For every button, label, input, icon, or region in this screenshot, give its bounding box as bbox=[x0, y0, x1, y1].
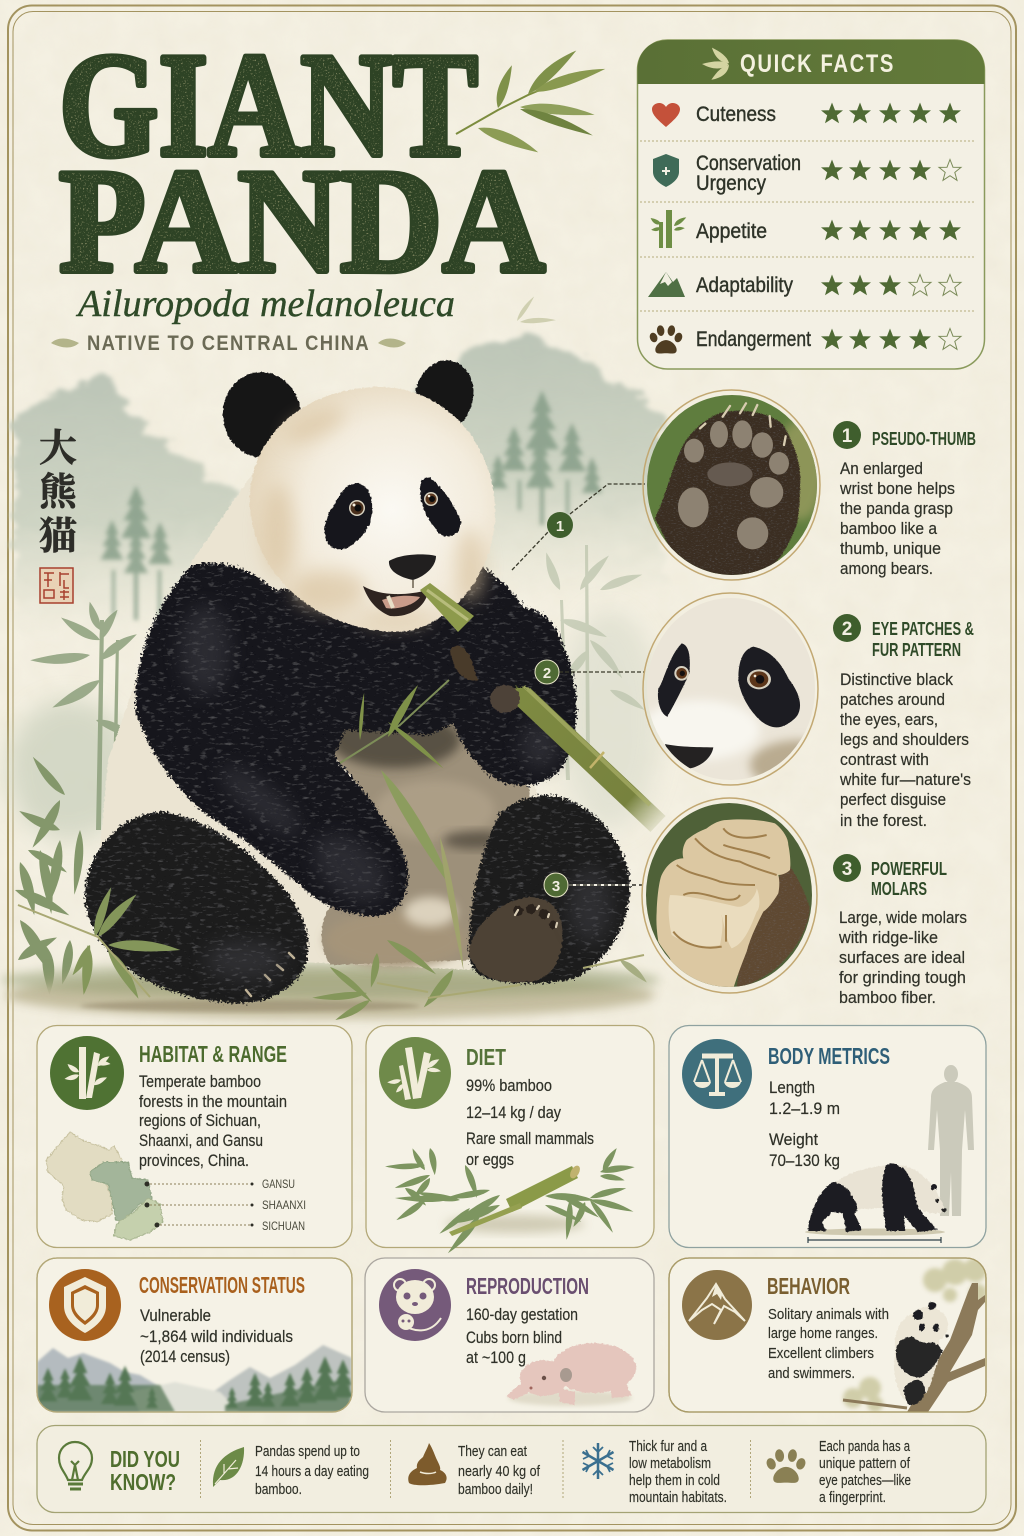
human silhouette bbox=[928, 1065, 974, 1216]
callout 2 text: eye patches: perfect disguise bbox=[840, 790, 946, 809]
bamboo stems on ground bbox=[18, 905, 644, 998]
title bbox=[59, 23, 545, 304]
callout 1 text: pseudo-thumb: among bears. bbox=[840, 559, 933, 578]
inset: paw bbox=[640, 388, 825, 583]
did you know heading: DID YOU bbox=[110, 1446, 180, 1472]
callout 2 text: eye patches: white fur—nature's bbox=[839, 770, 971, 789]
icon: mountain bbox=[682, 1270, 752, 1340]
fact: daily bamboo: bamboo daily! bbox=[458, 1481, 533, 1498]
callout 3 text: molars: bamboo fiber. bbox=[839, 988, 936, 1007]
habitat text: Shaanxi, and Gansu bbox=[139, 1131, 263, 1150]
giant panda illustration bbox=[18, 354, 658, 1024]
did you know heading: KNOW? bbox=[110, 1469, 176, 1495]
left hind leg bbox=[85, 812, 308, 1003]
scientific name: Ailuropoda melanoleuca bbox=[75, 283, 455, 325]
callout 2 text: eye patches: FUR PATTERN bbox=[872, 640, 961, 660]
callout 2 leader bbox=[559, 671, 645, 673]
icon: scales bbox=[682, 1039, 752, 1109]
fact: daily bamboo: nearly 40 kg of bbox=[458, 1463, 541, 1480]
right hind leg bbox=[469, 795, 630, 983]
title: PANDA bbox=[59, 139, 545, 304]
newborn cub bbox=[506, 1343, 636, 1406]
callout 1 leader bbox=[512, 484, 645, 570]
torso bbox=[100, 430, 540, 970]
body metrics text: Length bbox=[769, 1078, 815, 1097]
fact: unique patches bbox=[767, 1438, 911, 1506]
callout 1 text: pseudo-thumb: bamboo like a bbox=[840, 519, 937, 538]
adaptability row: Adaptability bbox=[696, 274, 793, 297]
quick facts panel bbox=[638, 40, 984, 369]
fact: cold habitats: Thick fur and a bbox=[629, 1438, 708, 1455]
quick facts header bbox=[638, 40, 984, 84]
callout 1 text: pseudo-thumb: PSEUDO-THUMB bbox=[872, 429, 976, 449]
panel: did you know bbox=[37, 1426, 986, 1512]
conservation text: (2014 census) bbox=[140, 1347, 230, 1366]
habitat text: provinces, China. bbox=[139, 1151, 249, 1170]
reproduction text: Cubs born blind bbox=[466, 1328, 562, 1347]
marker 1: 1 bbox=[556, 518, 564, 535]
fact: cold habitats: help them in cold bbox=[629, 1472, 720, 1489]
ears bbox=[217, 354, 481, 463]
chinese characters: 猫 bbox=[39, 505, 77, 560]
red seal bbox=[40, 568, 73, 603]
conservation text: ~1,864 wild individuals bbox=[140, 1327, 293, 1346]
province labels: SICHUAN bbox=[262, 1219, 305, 1233]
chinese characters: 熊 bbox=[39, 461, 79, 516]
right arm bbox=[444, 611, 576, 786]
endangerment row: Endangerment bbox=[696, 328, 811, 351]
fact: unique patches: unique pattern of bbox=[819, 1455, 911, 1472]
left arm and chest bbox=[135, 563, 525, 916]
fact: eating hours: Pandas spend up to bbox=[255, 1443, 360, 1460]
mouth bbox=[363, 586, 428, 616]
nose bbox=[389, 554, 436, 588]
icon: panda with cub bbox=[379, 1269, 451, 1341]
callout 2 text: eye patches: EYE PATCHES & bbox=[872, 619, 974, 639]
conservation urgency row bbox=[653, 152, 961, 195]
left foot claws bbox=[246, 953, 294, 996]
fact: daily bamboo: They can eat bbox=[458, 1443, 528, 1460]
diet text: 12–14 kg / day bbox=[466, 1103, 561, 1122]
marker 3 bbox=[544, 873, 568, 897]
ink sprig on mountain bbox=[515, 295, 556, 324]
habitat text: regions of Sichuan, bbox=[139, 1111, 261, 1130]
reproduction text bbox=[466, 1305, 578, 1367]
callout 3 text: molars: surfaces are ideal bbox=[839, 948, 965, 967]
fact: unique patches: eye patches—like bbox=[819, 1472, 911, 1489]
quick facts header: QUICK FACTS bbox=[740, 50, 895, 78]
behavior text: Solitary animals with bbox=[768, 1306, 889, 1323]
cuteness row bbox=[652, 102, 961, 127]
icon: light bulb bbox=[59, 1442, 92, 1489]
walking panda bbox=[805, 1164, 946, 1243]
ground bbox=[0, 962, 660, 1019]
diet text bbox=[466, 1076, 594, 1169]
conservation heading: CONSERVATION STATUS bbox=[139, 1272, 305, 1298]
foreground grass bbox=[13, 755, 85, 995]
callout 3 text: molars: POWERFUL bbox=[871, 859, 947, 879]
conservation text bbox=[140, 1306, 293, 1366]
habitat text: Temperate bamboo bbox=[139, 1072, 261, 1091]
did you know heading bbox=[110, 1446, 180, 1495]
mountain forest scene bbox=[37, 1345, 354, 1412]
bamboo illustration bbox=[385, 1146, 635, 1256]
bamboo leaves on belly bbox=[340, 680, 467, 970]
callout 3 text: molars: Large, wide molars bbox=[839, 908, 967, 927]
habitat text bbox=[139, 1072, 287, 1170]
callout 3 text: molars: for grinding tough bbox=[839, 968, 966, 987]
behavior text bbox=[768, 1306, 889, 1382]
conservation urgency row: Urgency bbox=[696, 172, 766, 195]
eye patches bbox=[325, 477, 461, 549]
fact: eating hours bbox=[213, 1443, 369, 1498]
habitat text: forests in the mountain bbox=[139, 1092, 287, 1111]
callout 2 text: eye patches: Distinctive black bbox=[840, 670, 953, 689]
conservation text: Vulnerable bbox=[140, 1306, 211, 1325]
background trees bbox=[101, 390, 602, 620]
fact: cold habitats bbox=[582, 1438, 727, 1506]
province labels: SHAANXI bbox=[262, 1198, 306, 1212]
body metrics text: 1.2–1.9 m bbox=[769, 1099, 840, 1118]
conservation urgency row: Conservation bbox=[696, 152, 801, 175]
panel: habitat and range bbox=[37, 1026, 352, 1248]
marker 3: 3 bbox=[552, 878, 560, 895]
behavior text: and swimmers. bbox=[768, 1365, 855, 1382]
body metrics text: 70–130 kg bbox=[769, 1151, 840, 1170]
callout 1 text: pseudo-thumb: thumb, unique bbox=[840, 539, 941, 558]
diet text: or eggs bbox=[466, 1150, 514, 1169]
callout 1 text: pseudo-thumb: wrist bone helps bbox=[839, 479, 955, 498]
callout 2 text: eye patches bbox=[833, 614, 974, 830]
eyes bbox=[349, 492, 438, 516]
panel: reproduction bbox=[365, 1258, 654, 1412]
callout 1 text: pseudo-thumb: the panda grasp bbox=[840, 499, 953, 518]
panel: behavior bbox=[669, 1258, 987, 1412]
head bbox=[217, 354, 495, 632]
callout 3 text: molars: MOLARS bbox=[871, 879, 927, 899]
panel: body metrics bbox=[669, 1026, 986, 1248]
reproduction heading: REPRODUCTION bbox=[466, 1273, 589, 1299]
callout 3 leader bbox=[569, 884, 645, 886]
icon: shield bbox=[49, 1269, 121, 1341]
diet text: Rare small mammals bbox=[466, 1129, 594, 1148]
province labels: GANSU bbox=[262, 1177, 295, 1191]
habitat heading: HABITAT & RANGE bbox=[139, 1041, 287, 1067]
fact: cold habitats: low metabolism bbox=[629, 1455, 711, 1472]
panel: conservation status bbox=[37, 1258, 354, 1412]
marker 2: 2 bbox=[543, 665, 551, 682]
marker 1 bbox=[547, 512, 573, 538]
callout 2 text: eye patches: the eyes, ears, bbox=[840, 710, 938, 729]
fact: daily bamboo bbox=[408, 1443, 541, 1498]
fact: unique patches: Each panda has a bbox=[819, 1438, 910, 1455]
province labels bbox=[144, 1177, 306, 1233]
fact: cold habitats: mountain habitats. bbox=[629, 1489, 727, 1506]
reproduction text: at ~100 g bbox=[466, 1348, 526, 1367]
fact: eating hours: bamboo. bbox=[255, 1481, 302, 1498]
fact: eating hours: 14 hours a day eating bbox=[255, 1463, 369, 1480]
panel: diet bbox=[366, 1026, 654, 1256]
chinese characters bbox=[39, 417, 79, 560]
behavior heading: BEHAVIOR bbox=[767, 1273, 850, 1299]
callout 3 text: molars: 3 bbox=[842, 859, 852, 880]
title: PANDA bbox=[59, 139, 545, 304]
callout 3 text: molars: with ridge-like bbox=[838, 928, 938, 947]
reproduction text: 160-day gestation bbox=[466, 1305, 578, 1324]
body metrics text: Weight bbox=[769, 1130, 818, 1149]
behavior text: Excellent climbers bbox=[768, 1345, 874, 1362]
cheek shading bbox=[262, 401, 484, 625]
callout 1 text: pseudo-thumb: 1 bbox=[842, 426, 853, 447]
bamboo stalk bbox=[420, 583, 658, 824]
fact: unique patches: a fingerprint. bbox=[819, 1489, 886, 1506]
native to central china: NATIVE TO CENTRAL CHINA bbox=[87, 332, 370, 355]
appetite row bbox=[649, 210, 961, 248]
bamboo sprig by title bbox=[456, 45, 607, 156]
behavior text: large home ranges. bbox=[768, 1325, 878, 1342]
right bamboo plant bbox=[541, 545, 647, 780]
appetite row: Appetite bbox=[696, 220, 767, 243]
icon: diet bamboo bbox=[379, 1037, 451, 1109]
face bbox=[250, 387, 495, 632]
adaptability row bbox=[648, 272, 961, 297]
diet heading: DIET bbox=[466, 1044, 506, 1070]
background misty mountains bbox=[8, 295, 665, 995]
callout 3 text: molars bbox=[833, 854, 967, 1007]
inset: molar bbox=[640, 795, 825, 995]
climbing panda in tree bbox=[843, 1258, 987, 1412]
toe claws bbox=[515, 906, 557, 927]
callout 2 text: eye patches: 2 bbox=[842, 619, 852, 640]
callout 2 text: eye patches: contrast with bbox=[840, 750, 929, 769]
ground leaves bbox=[70, 885, 650, 1024]
endangerment row bbox=[650, 325, 961, 353]
belly shading bbox=[325, 712, 507, 968]
icon: habitat bamboo bbox=[50, 1036, 124, 1110]
diet text: 99% bamboo bbox=[466, 1076, 552, 1095]
marker 2 bbox=[535, 660, 559, 684]
fur sheen bbox=[180, 605, 612, 980]
title: GIANT bbox=[59, 23, 478, 188]
right foot sole bbox=[469, 897, 563, 982]
callout 2 text: eye patches: patches around bbox=[840, 690, 945, 709]
inset: eye patches bbox=[642, 592, 819, 786]
cuteness row: Cuteness bbox=[696, 103, 776, 126]
body metrics text bbox=[769, 1078, 840, 1170]
title: GIANT bbox=[59, 23, 478, 188]
left bamboo plant bbox=[30, 601, 139, 830]
callout 2 text: eye patches: in the forest. bbox=[840, 811, 927, 830]
province map bbox=[46, 1132, 163, 1240]
right hand bbox=[450, 608, 566, 713]
callout 1 text: pseudo-thumb bbox=[833, 421, 976, 578]
callout 1 text: pseudo-thumb: An enlarged bbox=[840, 459, 923, 478]
body metrics heading: BODY METRICS bbox=[768, 1043, 890, 1069]
callout 2 text: eye patches: legs and shoulders bbox=[840, 730, 969, 749]
chinese characters: 大 bbox=[39, 417, 77, 472]
haze lower left bbox=[8, 610, 660, 840]
